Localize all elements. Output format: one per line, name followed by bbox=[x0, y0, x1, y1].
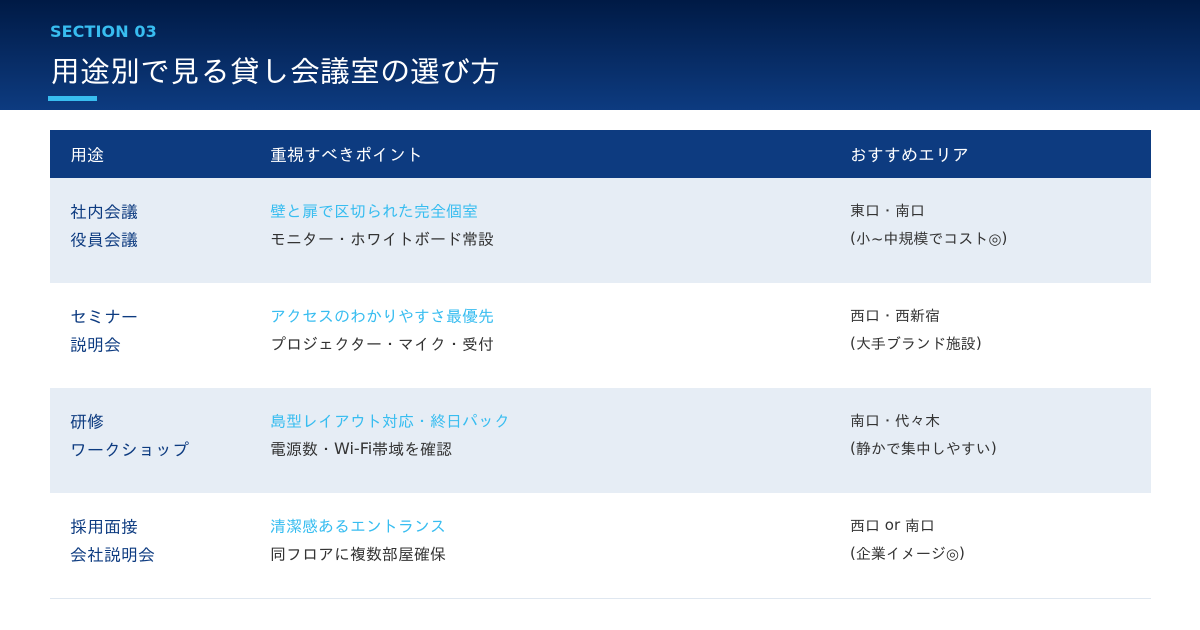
points: 電源数・Wi-Fi帯域を確認 bbox=[270, 439, 452, 459]
use: 採用面接 bbox=[70, 518, 138, 538]
points bbox=[270, 202, 494, 249]
use bbox=[70, 518, 155, 566]
points bbox=[270, 412, 510, 459]
use bbox=[70, 308, 138, 356]
area: 西口 or 南口 bbox=[850, 516, 935, 535]
points bbox=[270, 517, 446, 564]
use: 説明会 bbox=[70, 336, 121, 356]
points: 壁と扉で区切られた完全個室 bbox=[270, 202, 478, 221]
section label: SECTION 03 bbox=[50, 22, 157, 41]
area: (小~中規模でコスト◎) bbox=[850, 229, 1007, 248]
title accent bar bbox=[48, 96, 97, 101]
points: モニター・ホワイトボード常設 bbox=[270, 230, 494, 249]
points: プロジェクター・マイク・受付 bbox=[270, 335, 494, 354]
area bbox=[850, 307, 982, 353]
use: 役員会議 bbox=[70, 231, 138, 251]
area bbox=[850, 412, 997, 458]
use: ワークショップ bbox=[70, 441, 189, 461]
use bbox=[70, 413, 189, 461]
use bbox=[70, 203, 138, 251]
points: 清潔感あるエントランス bbox=[270, 517, 446, 536]
use: セミナー bbox=[70, 308, 138, 328]
header banner bbox=[0, 0, 1200, 110]
area bbox=[850, 516, 965, 563]
row: training bbox=[50, 388, 1151, 493]
table header row bbox=[50, 130, 1151, 178]
use: 会社説明会 bbox=[70, 546, 155, 566]
area bbox=[850, 202, 1007, 248]
use: 社内会議 bbox=[70, 203, 138, 223]
area: (大手ブランド施設) bbox=[850, 334, 982, 353]
area: 東口・南口 bbox=[850, 202, 925, 220]
row: seminars bbox=[70, 307, 982, 356]
area: (静かで集中しやすい) bbox=[850, 439, 997, 458]
row: internal meetings bbox=[50, 178, 1151, 283]
points: アクセスのわかりやすさ最優先 bbox=[270, 307, 494, 326]
column heading: use: 用途 bbox=[70, 146, 104, 166]
row: interviews bbox=[50, 493, 1151, 599]
area: (企業イメージ◎) bbox=[850, 544, 965, 563]
column heading: area: おすすめエリア bbox=[850, 146, 969, 166]
points: 同フロアに複数部屋確保 bbox=[270, 545, 446, 564]
points: 島型レイアウト対応・終日パック bbox=[270, 412, 510, 431]
area: 南口・代々木 bbox=[850, 412, 940, 430]
use: 研修 bbox=[70, 413, 104, 433]
column heading: key points: 重視すべきポイント bbox=[270, 146, 423, 166]
points bbox=[270, 307, 494, 354]
title: 用途別で見る貸し会議室の選び方 bbox=[50, 55, 500, 90]
area: 西口・西新宿 bbox=[850, 307, 940, 325]
